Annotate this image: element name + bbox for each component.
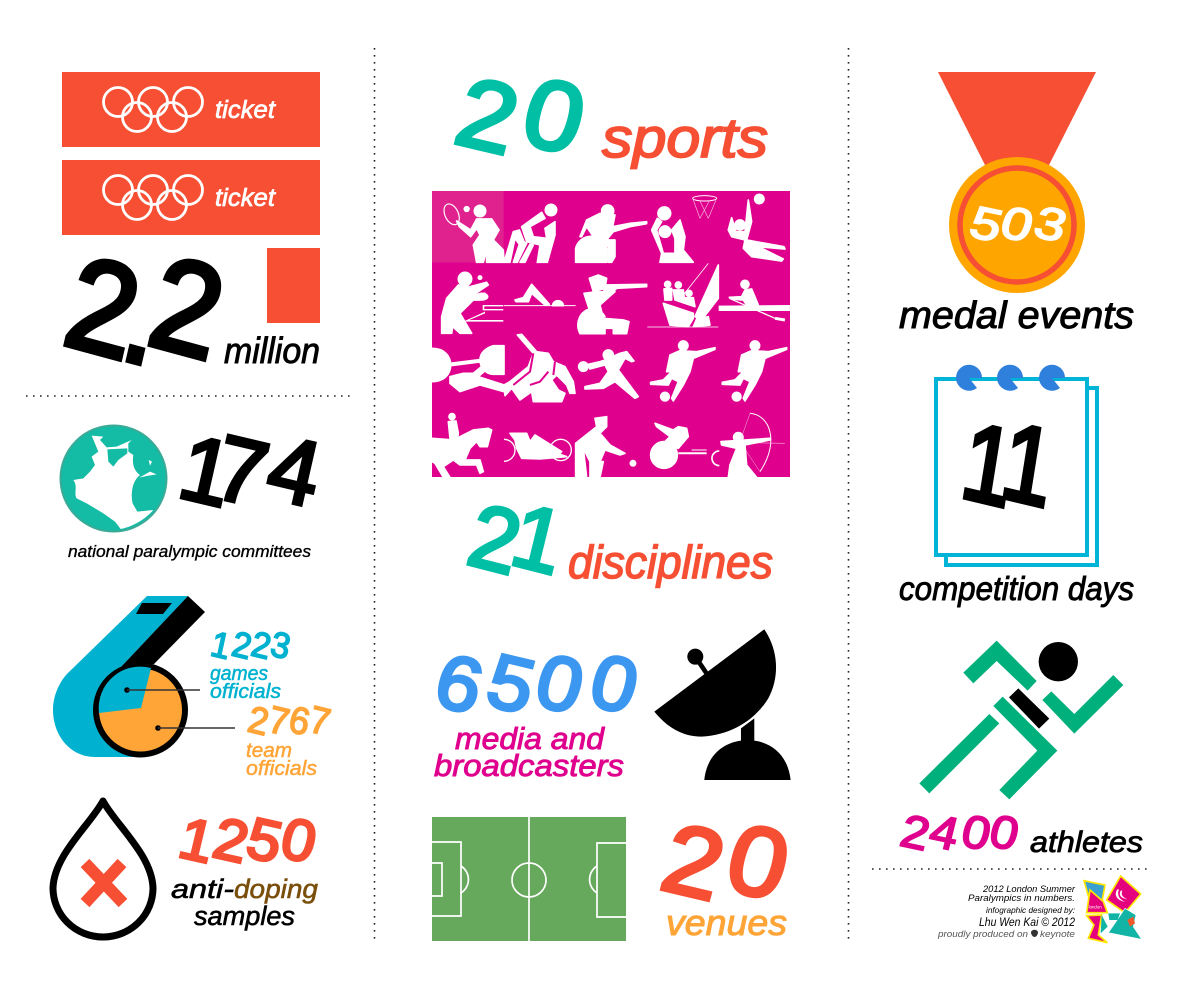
- number: 503: 503: [964, 197, 1073, 252]
- number: 1250: 1250: [173, 805, 323, 876]
- icon: wheelchair tennis: [441, 202, 504, 262]
- number: 20 sports: 20: [446, 57, 596, 176]
- icon: shooting: [578, 275, 647, 334]
- ticket 1: ticket: [215, 96, 276, 124]
- pictogram grid: [432, 191, 790, 477]
- number: 20 venues: 20: [652, 803, 800, 922]
- icon: sailing: [647, 263, 718, 327]
- panel: anti-doping samples: [53, 801, 323, 937]
- label: media and broadcasters: broadcasters: [434, 748, 624, 783]
- label: anti-doping samples: doping: [234, 874, 318, 904]
- icon: judo: [504, 334, 575, 402]
- icon: table tennis: [442, 272, 503, 333]
- icon: handcycling: [504, 433, 571, 461]
- panel: competition days: [899, 365, 1134, 607]
- text block: credits: 2012 London Summer: [982, 884, 1076, 895]
- icon: archery: [721, 413, 785, 477]
- panel: national paralympic committees: [60, 416, 330, 561]
- icon: football 7-a-side: [722, 341, 787, 401]
- panel: officials: [53, 596, 335, 780]
- icon: blood drop with cross: [53, 801, 153, 937]
- number: 2767: 2767: [244, 697, 335, 744]
- icon: football 5-a-side: [651, 341, 715, 401]
- icon: para athletics: [576, 417, 636, 477]
- label: million: million: [224, 330, 320, 371]
- text block: credits: [937, 884, 1076, 939]
- icon: wheelchair racing: [651, 423, 719, 468]
- text block: credits: Lhu Wen Kai © 2012: [979, 917, 1076, 929]
- icon: London 2012 Paralympics logo: [1084, 876, 1142, 943]
- icon: medal: [938, 72, 1096, 293]
- icon: swimming: [504, 284, 576, 306]
- label: venues: venues: [666, 902, 787, 943]
- label: anti-doping samples: [171, 874, 318, 931]
- text block: credits: Paralympics in numbers.: [968, 893, 1075, 904]
- label: disciplines: disciplines: [568, 536, 773, 588]
- number: 2.2: 2.2: [54, 227, 237, 394]
- partial ticket: [267, 248, 320, 323]
- label: games officials: games: [210, 663, 268, 685]
- icon: satellite dish: [654, 629, 791, 780]
- panel: athletes: [895, 641, 1143, 861]
- label: games officials: [210, 663, 281, 703]
- text block: credits: infographic designed by:: [986, 905, 1076, 915]
- icon: equestrian: [432, 414, 492, 477]
- label: competition days: competition days: [899, 570, 1134, 607]
- panel: sports and disciplines: [432, 57, 790, 594]
- icon: calendar: [936, 365, 1097, 565]
- panel: media and broadcasters: [427, 629, 791, 783]
- label: sports: sports: [602, 106, 768, 169]
- number: 174: 174: [171, 416, 330, 527]
- label: games officials: officials: [210, 681, 281, 703]
- label: team officials: team: [246, 740, 292, 762]
- icon: London 2012 Paralympics logo: london: [1089, 905, 1102, 910]
- label: anti-doping samples: anti-: [171, 874, 234, 904]
- icon: wheelchair basketball: [652, 196, 717, 262]
- icon: whistle: [53, 596, 235, 757]
- label: team officials: [246, 740, 317, 780]
- icon: wheelchair rugby: [504, 204, 557, 262]
- number: 11: 11: [954, 399, 1062, 531]
- icon: wheelchair fencing: [576, 205, 647, 262]
- number: 6500: 6500: [427, 637, 647, 730]
- text block: credits: proudly produced on: [937, 929, 1028, 939]
- label: athletes: athletes: [1030, 826, 1143, 859]
- panel: credits: [937, 876, 1142, 943]
- icon: football pitch: [432, 817, 626, 941]
- label: national paralympic committees: national paralympic committees: [68, 542, 312, 561]
- ticket 1: [62, 72, 320, 147]
- label: media and broadcasters: [434, 721, 624, 783]
- number: 1223: 1223: [207, 624, 294, 668]
- icon: sitting volleyball: [728, 194, 785, 261]
- panel: medal events: [899, 72, 1134, 337]
- icon: rowing: [719, 280, 790, 320]
- number: 21: 21: [459, 484, 574, 594]
- label: team officials: officials: [246, 758, 317, 780]
- label: medal events: medal events: [899, 295, 1134, 337]
- icon: powerlifting: [432, 346, 504, 392]
- icon: globe: [60, 426, 166, 532]
- ticket 2: ticket: [215, 184, 276, 212]
- panel: tickets sold: [54, 72, 320, 394]
- panel: venues: [432, 803, 800, 943]
- ticket 2: [62, 160, 320, 235]
- icon: goalball: [579, 350, 638, 398]
- label: media and broadcasters: media and: [455, 721, 606, 756]
- text block: credits: keynote: [1040, 929, 1075, 939]
- icon: running athlete: [919, 641, 1123, 799]
- number: 2400: 2400: [895, 806, 1024, 861]
- label: anti-doping samples: samples: [194, 901, 295, 931]
